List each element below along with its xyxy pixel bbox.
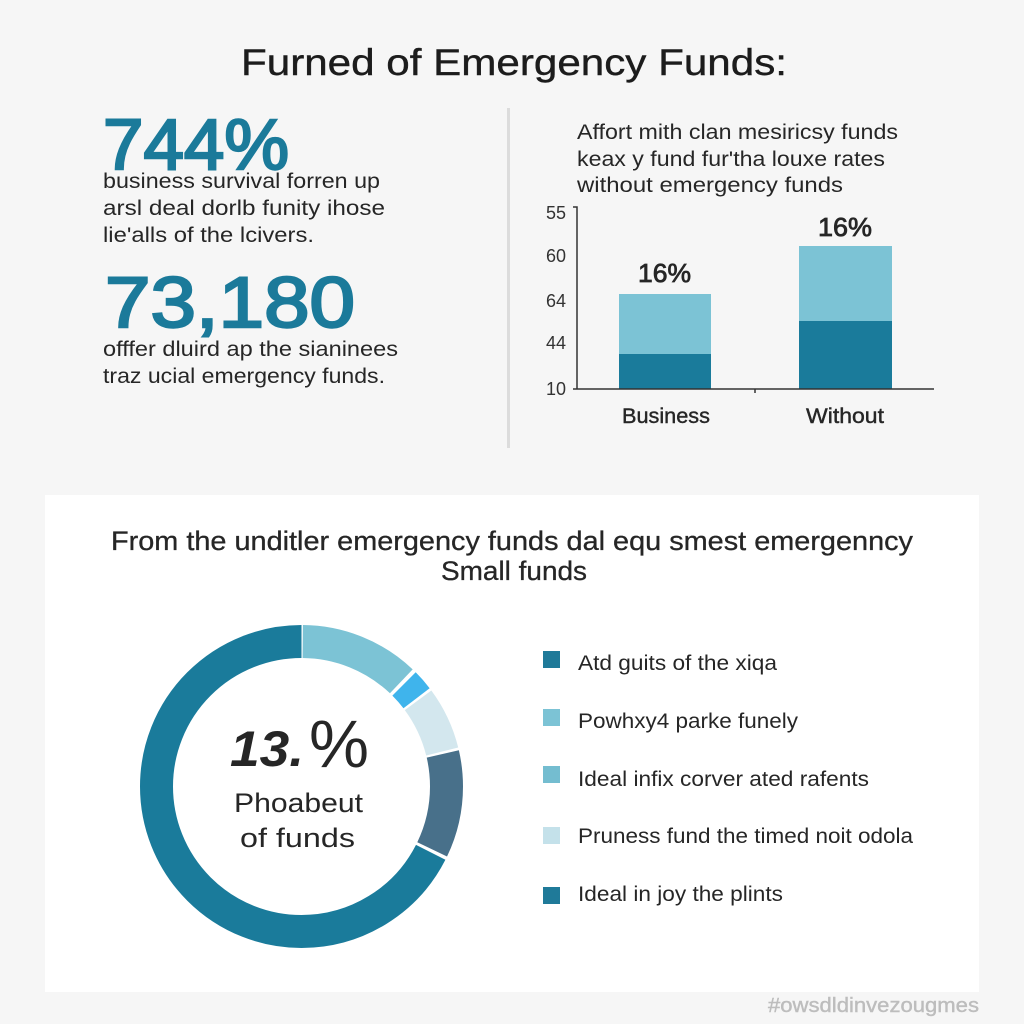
donut center label: of funds bbox=[240, 823, 355, 853]
donut center label: Phoabeut bbox=[234, 788, 364, 818]
text block: first statistic description: lie'alls of the lcivers. bbox=[103, 224, 314, 247]
text block: first statistic description bbox=[103, 170, 385, 247]
panel: bar chart section bbox=[546, 121, 934, 428]
legend item 5: Ideal in joy the plints bbox=[578, 883, 783, 906]
panel: small funds breakdown bbox=[45, 495, 979, 992]
donut center value: % bbox=[309, 707, 369, 782]
bar value: Without: 16% bbox=[818, 212, 872, 242]
panel: left statistics bbox=[103, 106, 398, 388]
panel heading: Small funds bbox=[441, 556, 587, 586]
bar: Business bbox=[619, 294, 711, 389]
legend bbox=[543, 651, 913, 906]
title: Furned of Emergency Funds: bbox=[241, 42, 787, 83]
chart axes bbox=[573, 207, 934, 393]
y axis labels: 44 bbox=[546, 333, 566, 353]
statistic: 744%: 744% bbox=[103, 106, 289, 185]
legend item 4: Pruness fund the timed noit odola bbox=[578, 825, 913, 848]
legend item 3: Ideal infix corver ated rafents bbox=[578, 768, 869, 791]
y axis labels bbox=[546, 203, 566, 399]
text block: second statistic description: traz ucial emergency funds. bbox=[103, 365, 385, 388]
watermark: #owsdldinvezougmes bbox=[768, 995, 979, 1017]
donut center label bbox=[234, 788, 364, 853]
category label: Without: Without bbox=[806, 405, 884, 428]
y axis labels: 55 bbox=[546, 203, 566, 223]
donut chart bbox=[156, 642, 446, 932]
panel heading bbox=[111, 526, 914, 586]
y axis labels: 64 bbox=[546, 291, 566, 311]
panel heading: From the unditler emergency funds dal equ smest emergenncy bbox=[111, 526, 914, 556]
legend item 1: Atd guits of the xiqa bbox=[578, 652, 777, 675]
bar value: Business: 16% bbox=[638, 258, 691, 288]
statistic: 73,180: 73,180 bbox=[105, 264, 355, 343]
chart heading: keax y fund fur'tha louxe rates bbox=[577, 148, 885, 171]
donut center value bbox=[230, 707, 369, 782]
chart heading: Affort mith clan mesiricsy funds bbox=[577, 121, 898, 144]
category label: Business: Business bbox=[622, 405, 710, 428]
text block: second statistic description: offfer dluird ap the sianinees bbox=[103, 338, 398, 361]
y axis labels: 60 bbox=[546, 246, 566, 266]
text block: second statistic description bbox=[103, 338, 398, 388]
chart heading bbox=[576, 121, 898, 197]
chart heading: without emergency funds bbox=[576, 174, 843, 197]
y axis labels: 10 bbox=[546, 379, 566, 399]
bar: Without bbox=[799, 246, 892, 389]
text block: first statistic description: business survival forren up bbox=[103, 170, 380, 193]
text block: first statistic description: arsl deal dorlb funity ihose bbox=[103, 197, 385, 220]
legend item 2: Powhxy4 parke funely bbox=[578, 710, 799, 733]
donut center value: 13. bbox=[230, 721, 304, 777]
